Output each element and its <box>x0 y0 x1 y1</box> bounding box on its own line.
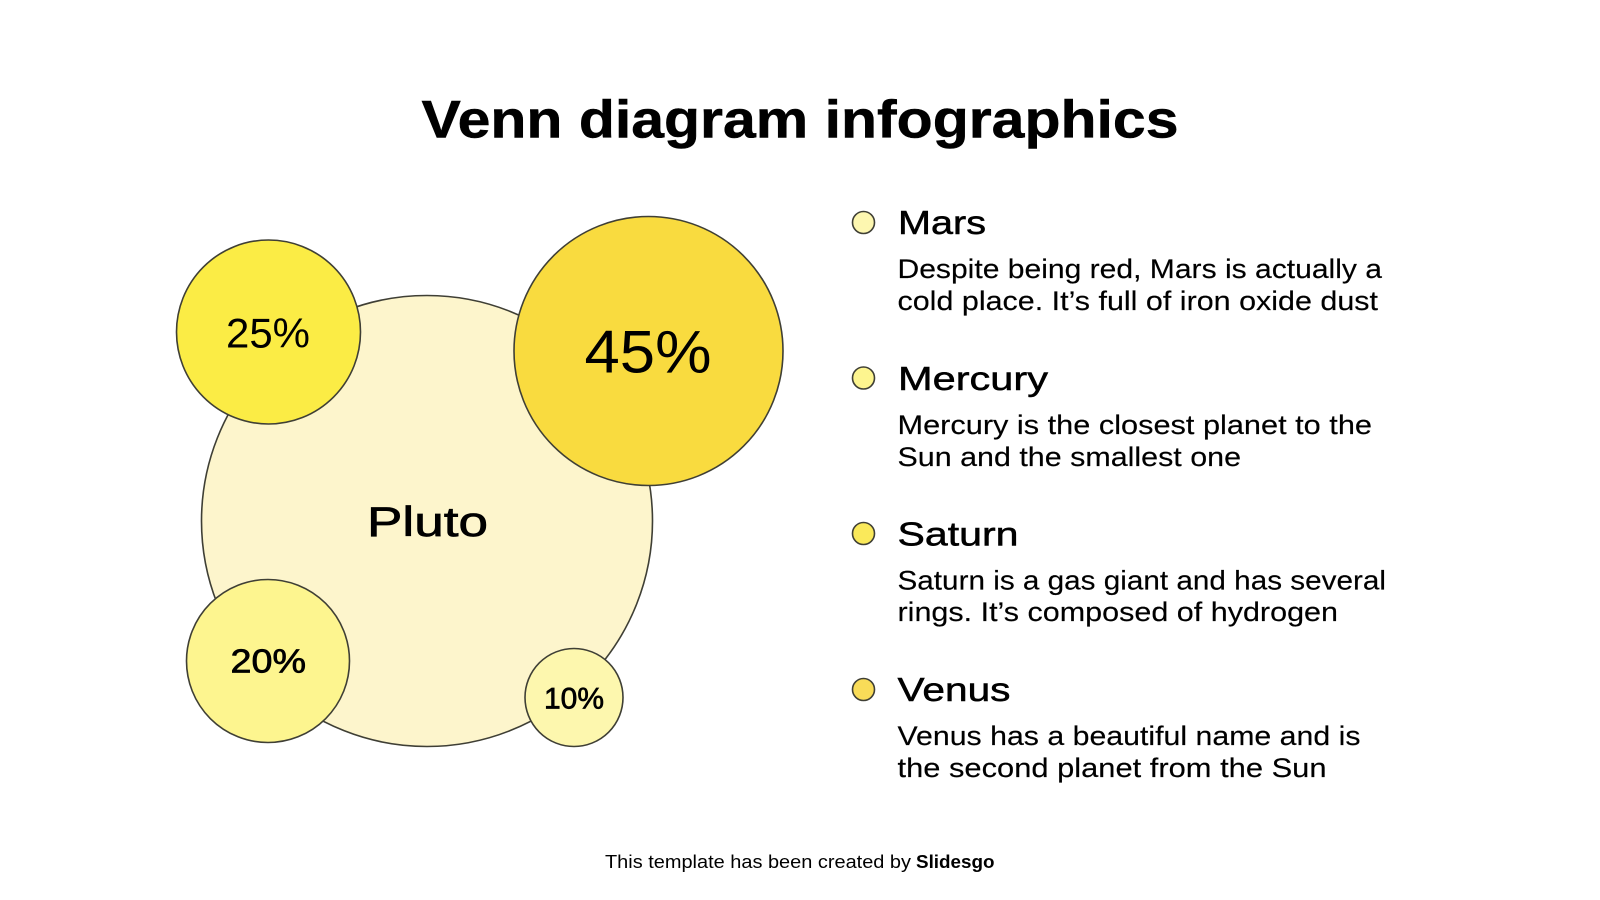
text: Mercury description <box>898 410 1372 472</box>
text: Venus description: Venus has a beautiful name and is <box>898 721 1360 751</box>
text: Saturn description: Saturn is a gas giant and has several <box>898 566 1386 596</box>
circle: 45%: 45% <box>584 318 712 386</box>
circle: 25% <box>176 240 360 424</box>
circle: Pluto <box>202 296 652 746</box>
heading: Mars: Mars <box>898 204 986 241</box>
venn diagram <box>176 216 783 746</box>
legend item: Venus <box>852 671 1360 783</box>
circle: 20%: 20% <box>230 642 306 680</box>
footer credit: This template has been created by <box>605 852 911 872</box>
footer credit: Slidesgo <box>916 852 995 872</box>
legend <box>852 204 1386 783</box>
text: Venus description: the second planet from the Sun <box>898 753 1326 783</box>
circle: 10% <box>525 648 623 746</box>
text: Mars description <box>898 254 1382 316</box>
circle: 20% <box>186 580 350 742</box>
heading: Venus: Venus <box>898 671 1010 708</box>
text: Venus description <box>898 721 1360 783</box>
text: Mercury description: Sun and the smallest one <box>898 442 1241 472</box>
text: Saturn description <box>898 566 1386 627</box>
circle: 25%: 25% <box>226 310 310 356</box>
icon: Venus dot <box>852 678 874 700</box>
icon: Mars dot <box>852 212 874 234</box>
title: Venn diagram infographics <box>422 90 1178 150</box>
text: Saturn description: rings. It’s composed of hydrogen <box>898 597 1338 627</box>
legend item: Mars <box>852 204 1382 316</box>
circle: 10%: 10% <box>544 682 604 716</box>
text: Mars description: Despite being red, Mars is actually a <box>898 254 1382 284</box>
icon: Saturn dot <box>852 522 874 544</box>
legend item: Saturn <box>852 516 1386 627</box>
heading: Saturn: Saturn <box>898 516 1018 552</box>
heading: Mercury: Mercury <box>898 360 1049 397</box>
circle: Pluto: Pluto <box>367 498 488 545</box>
icon: Mercury dot <box>852 367 874 389</box>
legend item: Mercury <box>852 360 1372 472</box>
circle: 45% <box>514 216 783 486</box>
text: Mercury description: Mercury is the closest planet to the <box>898 410 1372 440</box>
text: Mars description: cold place. It’s full of iron oxide dust <box>898 286 1379 316</box>
